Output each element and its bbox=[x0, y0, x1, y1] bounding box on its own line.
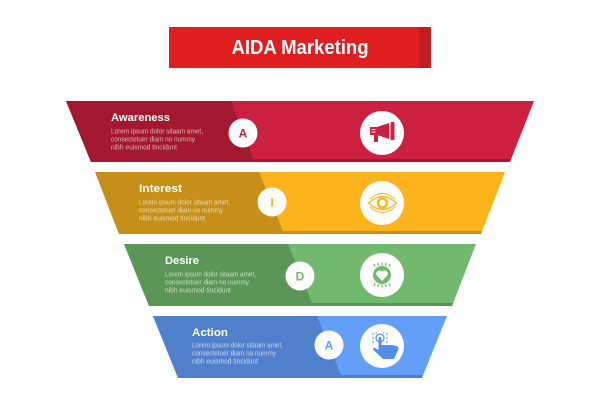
text block: desire: nibh euismod tincidunt bbox=[165, 288, 231, 294]
badge: A bbox=[314, 330, 344, 360]
text block: interest: Lorem ipsum dolor sitaam amet, bbox=[139, 200, 230, 206]
badge: A: A bbox=[239, 126, 248, 140]
heading: desire: Desire bbox=[165, 255, 199, 267]
text block: desire: Lorem ipsum dolor sitaam amet, bbox=[165, 272, 256, 278]
text block: desire: consectetuer diam no nummy bbox=[165, 280, 249, 286]
icon: megaphone bbox=[360, 111, 404, 155]
heading: awareness: Awareness bbox=[111, 112, 170, 124]
panel: interest bbox=[95, 172, 505, 234]
icon: eye bbox=[360, 181, 404, 225]
badge: A: A bbox=[325, 338, 334, 352]
badge: I bbox=[258, 188, 286, 216]
badge: D: D bbox=[296, 270, 305, 284]
text block: action: consectetuer diam no nummy bbox=[192, 350, 276, 358]
badge: A bbox=[228, 118, 258, 148]
panel: awareness bbox=[66, 101, 534, 162]
text block: interest: nibh euismod tincidunt bbox=[139, 216, 205, 222]
icon: touch hand bbox=[360, 324, 404, 368]
text block: awareness: Lorem ipsum dolor sitaam amet, bbox=[111, 128, 203, 136]
text block: action: nibh euismod tincidunt bbox=[192, 358, 258, 366]
badge: I: I bbox=[270, 196, 274, 210]
title: AIDA Marketing bbox=[232, 37, 368, 59]
title banner bbox=[169, 27, 431, 68]
icon: heart bbox=[360, 253, 404, 297]
text block: interest: consectetuer diam no nummy bbox=[139, 208, 223, 214]
badge: D bbox=[286, 262, 314, 290]
heading: action: Action bbox=[192, 327, 228, 339]
text block: awareness: nibh euismod tincidunt bbox=[111, 144, 177, 152]
text block: awareness: consectetuer diam no nummy bbox=[111, 136, 195, 144]
panel: desire bbox=[124, 244, 476, 306]
heading: interest: Interest bbox=[139, 183, 182, 195]
text block: action: Lorem ipsum dolor sitaam amet, bbox=[192, 342, 283, 350]
panel: action bbox=[153, 316, 447, 378]
